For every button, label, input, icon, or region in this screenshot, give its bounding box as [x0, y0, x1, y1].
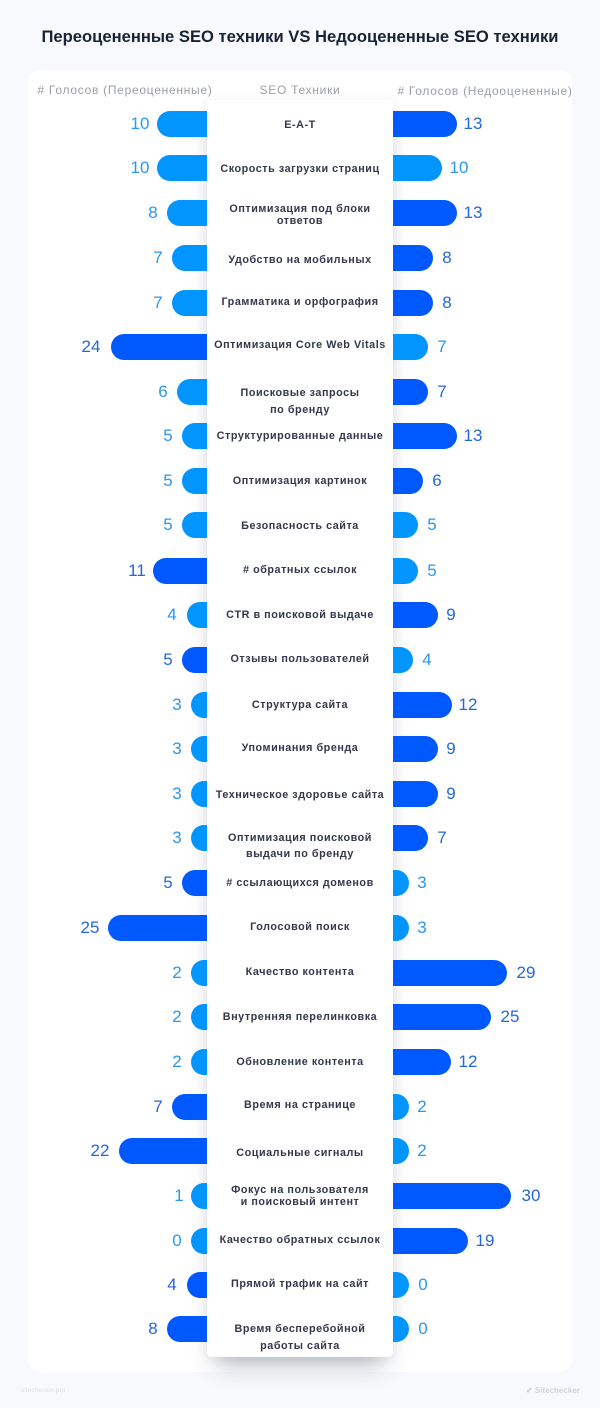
row: Качество контента: Качество контента	[246, 966, 354, 978]
row: Социальные сигналы	[91, 1138, 427, 1164]
row: Качество обратных ссылок	[172, 1228, 494, 1254]
row: Техническое здоровье сайта: 9	[446, 784, 456, 803]
row: Структурированные данные: 13	[464, 426, 482, 445]
row: Техническое здоровье сайта: 3	[172, 784, 182, 803]
row: E-A-T	[131, 111, 482, 137]
row: Качество контента	[172, 960, 535, 986]
row: Скорость загрузки страниц	[131, 155, 468, 181]
text: по бренду	[270, 404, 330, 416]
text: выдачи по бренду	[246, 848, 354, 860]
row: Безопасность сайта	[163, 512, 437, 538]
row: Грамматика и орфография: 8	[442, 293, 452, 312]
row: Оптимизация поисковой выдачи по бренду: Оптимизация поисковой	[228, 832, 372, 844]
row: CTR в поисковой выдаче: 9	[446, 605, 456, 624]
row: Поисковые запросы по бренду: 6	[158, 382, 168, 401]
row: Время на странице	[153, 1094, 427, 1120]
row: Время на странице: 2	[417, 1097, 427, 1116]
row: Оптимизация поисковой выдачи по бренду: 3	[172, 828, 182, 847]
row: CTR в поисковой выдаче: 4	[167, 605, 177, 624]
row: Структура сайта: 12	[459, 695, 477, 714]
row: Социальные сигналы: 22	[91, 1141, 109, 1160]
row: Внутренняя перелинковка: 2	[172, 1007, 182, 1026]
row: # обратных ссылок: 11	[128, 561, 146, 580]
row: Скорость загрузки страниц: 10	[131, 158, 149, 177]
row: Прямой трафик на сайт	[167, 1272, 428, 1298]
row: Внутренняя перелинковка: 25	[501, 1007, 519, 1026]
row: E-A-T: 13	[464, 114, 482, 133]
row: Прямой трафик на сайт: 4	[167, 1275, 177, 1294]
heading: right column: # Голосов (Недооцененные)	[397, 84, 573, 98]
row: Голосовой поиск: Голосовой поиск	[250, 921, 350, 933]
row: Удобство на мобильных	[153, 245, 452, 271]
heading: center column: SEO Техники	[260, 83, 340, 97]
row: Оптимизация Core Web Vitals: Оптимизация Core Web Vitals	[214, 339, 386, 351]
row: Отзывы пользователей: 4	[422, 650, 432, 669]
text: работы сайта	[260, 1340, 340, 1352]
row: Время бесперебойной работы сайта: 8	[148, 1319, 158, 1338]
row: Фокус на пользователя и поисковый интент: 30	[522, 1186, 540, 1205]
row: Оптимизация картинок: 5	[163, 471, 173, 490]
row: Структурированные данные: Структурированные данные	[217, 430, 383, 442]
row: Оптимизация Core Web Vitals: 24	[82, 337, 100, 356]
row: Оптимизация картинок: 6	[432, 471, 442, 490]
row: Структурированные данные: 5	[163, 426, 173, 445]
row: Структура сайта: 3	[172, 695, 182, 714]
heading: left column: # Голосов (Переоцененные)	[37, 83, 213, 97]
row: Обновление контента: 2	[172, 1052, 182, 1071]
row: Отзывы пользователей	[163, 647, 432, 673]
row: Оптимизация под блоки ответов: 13	[464, 203, 482, 222]
row: Внутренняя перелинковка	[172, 1004, 519, 1030]
footer: source: sitechecker.pro	[21, 1387, 65, 1394]
row: Поисковые запросы по бренду: 7	[437, 382, 447, 401]
row: Обновление контента: Обновление контента	[236, 1056, 364, 1068]
row: Удобство на мобильных: 8	[442, 248, 452, 267]
row: Безопасность сайта: 5	[427, 515, 437, 534]
row: # ссылающихся доменов: 5	[163, 873, 173, 892]
row: Качество обратных ссылок: 19	[476, 1231, 494, 1250]
row: Оптимизация Core Web Vitals: 7	[437, 337, 447, 356]
row: # ссылающихся доменов: # ссылающихся доменов	[226, 877, 374, 889]
row: # обратных ссылок	[128, 558, 437, 584]
row: Упоминания бренда: 9	[446, 739, 456, 758]
row: Оптимизация картинок	[163, 468, 442, 494]
row: Оптимизация картинок: Оптимизация картинок	[233, 475, 367, 487]
row: Внутренняя перелинковка: Внутренняя перелинковка	[223, 1011, 377, 1023]
row: Структурированные данные	[163, 423, 482, 449]
row: Отзывы пользователей: Отзывы пользователей	[230, 653, 370, 665]
footer: logo: ✔ Sitechecker	[526, 1386, 580, 1395]
row: Обновление контента: 12	[459, 1052, 477, 1071]
row: Социальные сигналы: Социальные сигналы	[236, 1147, 364, 1159]
row: Оптимизация поисковой выдачи по бренду	[172, 825, 447, 860]
row: E-A-T: E-A-T	[284, 119, 316, 131]
row: Социальные сигналы: 2	[417, 1141, 427, 1160]
row: Оптимизация Core Web Vitals	[82, 334, 447, 360]
row: Оптимизация под блоки ответов: Оптимизация под блоки	[229, 203, 371, 215]
row: Техническое здоровье сайта	[172, 781, 456, 807]
row: Безопасность сайта: Безопасность сайта	[241, 520, 359, 532]
row: Структура сайта	[172, 692, 477, 718]
row: Грамматика и орфография: Грамматика и орфография	[221, 296, 379, 308]
row: Прямой трафик на сайт: Прямой трафик на сайт	[231, 1278, 369, 1290]
row: Голосовой поиск: 3	[417, 918, 427, 937]
row: Голосовой поиск	[81, 915, 427, 941]
row: Качество обратных ссылок: 0	[172, 1231, 182, 1250]
row: Время бесперебойной работы сайта: 0	[418, 1319, 428, 1338]
row: Скорость загрузки страниц: 10	[450, 158, 468, 177]
row: Удобство на мобильных: 7	[153, 248, 163, 267]
row: Поисковые запросы по бренду: Поисковые запросы	[241, 387, 359, 399]
row: Прямой трафик на сайт: 0	[418, 1275, 428, 1294]
row: # обратных ссылок: 5	[427, 561, 437, 580]
row: Оптимизация под блоки ответов	[148, 200, 482, 227]
row: Структура сайта: Структура сайта	[252, 699, 348, 711]
row: # ссылающихся доменов	[163, 870, 427, 896]
row: Безопасность сайта: 5	[163, 515, 173, 534]
row: Фокус на пользователя и поисковый интент: 1	[174, 1186, 184, 1205]
row: Время бесперебойной работы сайта	[148, 1316, 428, 1352]
row: Упоминания бренда: Упоминания бренда	[242, 742, 358, 754]
row: Грамматика и орфография: 7	[153, 293, 163, 312]
row: CTR в поисковой выдаче	[167, 602, 456, 628]
row: Качество контента: 2	[172, 963, 182, 982]
row: Голосовой поиск: 25	[81, 918, 99, 937]
row: # обратных ссылок: # обратных ссылок	[243, 564, 357, 576]
row: Упоминания бренда: 3	[172, 739, 182, 758]
row: Оптимизация под блоки ответов: ответов	[277, 215, 323, 227]
row: Поисковые запросы по бренду	[158, 379, 447, 416]
row: Время бесперебойной работы сайта: Время бесперебойной	[234, 1323, 365, 1335]
row: Фокус на пользователя и поисковый интент: Фокус на пользователя	[231, 1184, 369, 1196]
row: CTR в поисковой выдаче: CTR в поисковой выдаче	[226, 609, 374, 621]
row: Упоминания бренда	[172, 736, 456, 762]
row: Отзывы пользователей: 5	[163, 650, 173, 669]
row: Качество контента: 29	[517, 963, 535, 982]
row: Время на странице: Время на странице	[244, 1099, 356, 1111]
row: Фокус на пользователя и поисковый интент: и поисковый интент	[241, 1196, 359, 1208]
row: Оптимизация поисковой выдачи по бренду: 7	[437, 828, 447, 847]
row: Оптимизация под блоки ответов: 8	[148, 203, 158, 222]
row: Грамматика и орфография	[153, 290, 452, 316]
panel: center column	[207, 100, 393, 1357]
row: Качество обратных ссылок: Качество обратных ссылок	[220, 1234, 380, 1246]
row: Время на странице: 7	[153, 1097, 163, 1116]
row: Техническое здоровье сайта: Техническое здоровье сайта	[216, 789, 384, 801]
row: E-A-T: 10	[131, 114, 149, 133]
row: Удобство на мобильных: Удобство на мобильных	[228, 254, 372, 266]
row: Скорость загрузки страниц: Скорость загрузки страниц	[220, 163, 380, 175]
row: # ссылающихся доменов: 3	[417, 873, 427, 892]
row: Фокус на пользователя и поисковый интент	[174, 1183, 540, 1209]
title: Переоцененные SEO техники VS Недооцененные SEO техники	[42, 27, 558, 46]
row: Обновление контента	[172, 1049, 477, 1075]
